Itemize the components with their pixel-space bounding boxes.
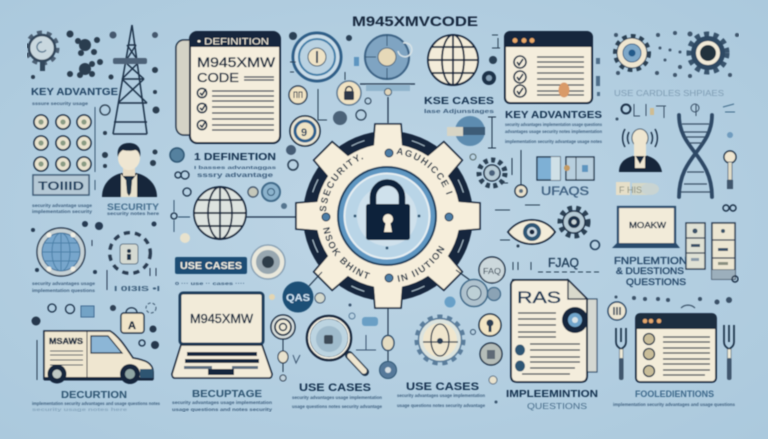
- icon grid: nine circles: [34, 115, 91, 171]
- icon: chain pendants: [380, 336, 396, 378]
- marks around fjaq: [495, 183, 600, 272]
- icon: van body: [37, 331, 153, 384]
- text: questions: QUESTIONS: [527, 402, 587, 411]
- subheading: questions 2: QUESTIONS: [626, 277, 686, 288]
- icon: padlock: [366, 182, 410, 240]
- label: fjaq: FJAQ: [548, 255, 579, 270]
- laptop base: [612, 243, 680, 248]
- label: faded caption: USE CARDLES SHPIAES: [614, 89, 724, 98]
- icon: small target: [590, 240, 600, 250]
- text lines: [537, 57, 584, 95]
- text: use cases caption 2: security advantages usage implementation: [397, 393, 485, 398]
- laptop label: M945XMW: [190, 312, 253, 326]
- check list: [514, 56, 526, 97]
- central gear with lock: [294, 122, 482, 310]
- subheading: questions: & DUESTIONS: [616, 266, 684, 277]
- icon: cream lock badge: [337, 81, 361, 105]
- blob: FIAS cream badge: [616, 182, 659, 195]
- heading: key advantage: KEY ADVANTGE: [31, 86, 118, 98]
- header text: • DEFINITION: [197, 36, 269, 46]
- card header: [190, 32, 280, 47]
- laptop screen: [618, 207, 675, 245]
- text: becuptage caption: usage questions and notes security: [172, 407, 273, 412]
- gear text arcs: IN IIUTION: [396, 245, 445, 282]
- fold corner: [568, 280, 587, 299]
- text: use cases caption 1: [292, 395, 382, 409]
- panel: laptop: [172, 293, 273, 412]
- icon: globe: [194, 187, 246, 239]
- text: advantages caption: advantages usage security notes implementation: [505, 129, 602, 134]
- heading: definition: 1 DEFINETION: [194, 151, 276, 163]
- decor: small marks: [31, 221, 156, 290]
- panel: FAQ and eye: [495, 150, 600, 272]
- gear ring dashes: [309, 137, 467, 295]
- label: small code: I 0I3IS •I: [114, 284, 160, 293]
- button: TOIIID: [33, 175, 89, 195]
- icon: glasses blob: [447, 116, 496, 148]
- van lettering: MSAWS: [49, 337, 84, 346]
- document lines: [518, 313, 580, 374]
- gear teeth: [296, 124, 480, 308]
- heading: use cases 2: USE CASES: [406, 381, 479, 393]
- panel: delivery van: [32, 303, 160, 412]
- text: subcaption: sssure security usage: [32, 101, 89, 106]
- icon: FAQ circle: FAQ: [483, 267, 501, 276]
- icon: orange seal: [558, 82, 570, 98]
- text: lines under globe: security advantages usage: [32, 281, 95, 286]
- icon: outlined gear with lock: [110, 233, 150, 273]
- heading: implementation: IMPLEEMINTION: [506, 388, 598, 400]
- label: security: SECURITY: [107, 202, 159, 212]
- icon: key badge: [479, 314, 501, 336]
- text: caption lines: [32, 203, 160, 216]
- text: definition subcaption: [194, 165, 277, 179]
- icon: target: [271, 315, 295, 381]
- icon: gear with globe: [417, 317, 463, 363]
- icon: cream globe: [428, 35, 478, 85]
- icon: man in suit: [102, 143, 157, 197]
- text: decurtion caption: implementation security advantages and usage questions notes: [32, 401, 160, 406]
- icon: ring target: [293, 33, 341, 81]
- icon: grey gear: [251, 245, 285, 279]
- text: caption lines: implementation security: [32, 209, 93, 214]
- gear small dots: [322, 149, 453, 282]
- file cabinet small: [686, 223, 705, 269]
- icon: FAQ circle: [479, 257, 505, 283]
- icon: DNA helix: [679, 115, 712, 197]
- decor: dots between gears: [614, 31, 739, 78]
- blob: FIAS cream badge: F HIS: [619, 185, 642, 195]
- text: decurtion caption: security usage notes here: [32, 407, 128, 412]
- text: advantages caption: implementation security advantage usage notes: [505, 139, 602, 144]
- text: caption lines: security notes here: [107, 211, 160, 216]
- card subtitle: CODE: [197, 71, 239, 85]
- heading: becuptage: BECUPTAGE: [192, 389, 262, 400]
- browser header: [505, 32, 592, 47]
- icon: two window panes: [537, 157, 594, 180]
- icon: pin: [512, 150, 527, 197]
- icon: puzzle nodes: [31, 30, 160, 168]
- icon: man with signal waves: [619, 129, 662, 172]
- heading: decurtion: DECURTION: [61, 390, 127, 401]
- icon: tag circle: [608, 302, 626, 320]
- icon: gear: [27, 33, 57, 71]
- heading: kse cases: KSE CASES: [424, 95, 494, 107]
- icon: right gear: [479, 160, 505, 186]
- text: use cases caption 1: security advantages usage implementation: [292, 395, 382, 400]
- gear dark ring: [303, 131, 473, 301]
- browser dots: [512, 38, 534, 43]
- heading: enplemtion: FNPLEMTION: [614, 256, 687, 267]
- text: fooledientions caption: implementation security advantages and usage questions: [613, 402, 735, 407]
- text: becuptage caption: security advantages usage implementation: [172, 400, 272, 405]
- icon: padlock tag: A: [128, 320, 136, 332]
- text: lines under globe: implementation questions: [32, 288, 95, 293]
- laptop base: [172, 345, 272, 378]
- document title: RAS: [517, 288, 561, 307]
- heading: key advantages: KEY ADVANTGES: [505, 109, 602, 121]
- text: kse subcaption: Iase Adjunstages: [424, 109, 494, 115]
- text: definition subcaption: I basses advantaggas: [194, 165, 277, 170]
- decor: center marks: [288, 32, 500, 170]
- text: use cases caption 2: usage questions notes security advantage: [397, 403, 485, 408]
- icon: magnifier: [308, 317, 365, 372]
- text: caption lines: security advantage usage: [32, 203, 92, 208]
- gear text arcs: [319, 148, 453, 282]
- file cabinet large: [712, 223, 738, 282]
- divider line: [94, 107, 96, 190]
- gear text arcs: SSECURITY.: [319, 154, 364, 212]
- badge: use cases: USE CASES: [180, 260, 242, 272]
- icon row: [616, 104, 699, 120]
- marks beside card: [596, 58, 600, 96]
- text: use cases caption 1: usage questions notes security advantage: [292, 404, 382, 409]
- icon: numbered target: [290, 116, 320, 146]
- text: decurtion caption: [32, 401, 160, 412]
- panel: bottom center cluster: [269, 257, 505, 409]
- badge: use cases: [175, 257, 247, 274]
- panel: top center icons: [288, 32, 505, 186]
- button: TOIIID: TOIIID: [38, 179, 84, 193]
- icon: numbered target: 9: [301, 127, 307, 139]
- panel: right laptop and cabinets: [608, 207, 738, 407]
- icon: eye: [508, 220, 555, 244]
- panel: security globe and blob gear: [31, 221, 160, 293]
- check rows: [197, 77, 274, 130]
- icon: dark gear: [689, 34, 727, 72]
- icon: blue globe: [37, 228, 85, 276]
- text: definition subcaption: sssry advantage: [197, 173, 274, 179]
- icon: QAS circle: [282, 282, 314, 312]
- gear text arcs: NSOK BHINT: [322, 226, 371, 280]
- text: becuptage caption: [172, 400, 273, 412]
- title: M945XMVCODE: [352, 14, 478, 29]
- connector: QAS to gear: [309, 270, 474, 372]
- document bullets: [515, 344, 525, 372]
- laptop screen: [180, 293, 263, 344]
- panel: key advantages browser card: [505, 32, 602, 144]
- gear text arcs: AGUHICCE I: [396, 148, 453, 195]
- gear cream ring: [316, 144, 460, 288]
- connector: globe to gear: [246, 216, 297, 218]
- text: advantages caption: security advantages implementation usage questions: [505, 122, 602, 127]
- panel: definition card: [176, 32, 280, 143]
- heading: fooledientions: FOOLEDIENTIONS: [635, 389, 714, 400]
- text: use cases caption 2: [397, 393, 485, 408]
- icon: QAS circle: QAS: [286, 293, 310, 304]
- icon: eye gear: [560, 208, 588, 236]
- document badge: [562, 307, 588, 333]
- icon: left fork: [616, 328, 626, 380]
- icon row above van: [32, 303, 159, 349]
- icon: transmission tower: [113, 25, 147, 134]
- heading: use cases 1: USE CASES: [299, 382, 371, 394]
- text: badge caption: 0 ··· use ·· cases ····: [175, 281, 245, 286]
- icon: grey badge: [480, 343, 502, 365]
- decor: dots row: [614, 296, 732, 308]
- browser window: [636, 314, 716, 382]
- panel: RAS document: [506, 280, 598, 411]
- text: advantages caption: [505, 122, 602, 144]
- icon: key: [723, 104, 736, 211]
- label: ufaqs: UFAQS: [541, 186, 589, 198]
- icon: dark ring: [365, 35, 412, 79]
- panel: right gears: [614, 31, 739, 211]
- decor: marks: [269, 293, 498, 404]
- icon: double coin: [460, 280, 500, 306]
- icon: cream gear: [616, 36, 648, 70]
- book backing: [176, 40, 190, 135]
- connector: top chain: [360, 84, 415, 123]
- text: lines under globe: [32, 281, 95, 293]
- lock ring: [337, 166, 437, 266]
- panel: key advantage left column: [27, 25, 160, 216]
- icon: definition cluster: [170, 145, 296, 243]
- icon: cream tag: [289, 86, 307, 104]
- icon: right fork: [724, 325, 734, 380]
- laptop label: MOAKW: [629, 220, 666, 230]
- card title: M945XMW: [197, 55, 275, 70]
